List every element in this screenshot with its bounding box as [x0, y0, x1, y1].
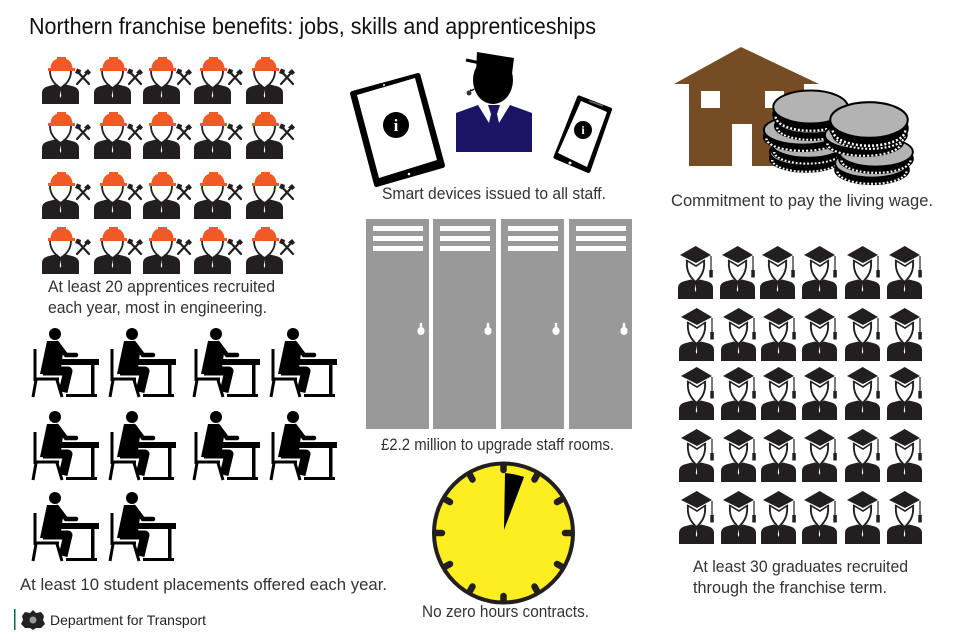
- caption: staff rooms: £2.2 million to upgrade staff rooms.: [381, 436, 614, 454]
- icon: smartphone: [556, 98, 610, 171]
- caption: apprentices: At least 20 apprentices recruited: [48, 278, 275, 296]
- caption: living wage: Commitment to pay the living wage.: [671, 192, 933, 210]
- icon: staff member: [456, 52, 532, 152]
- title: Northern franchise benefits: jobs, skills and apprenticeships: [29, 13, 596, 39]
- icon grid: student placements: [33, 328, 337, 561]
- icon: clock: [434, 464, 573, 602]
- logo: Department for Transport: Department for Transport: [50, 612, 206, 628]
- icon: smartphone: i: [581, 123, 585, 137]
- icon: tablet: i: [394, 116, 399, 135]
- caption: apprentices: [48, 278, 275, 317]
- caption: graduates: [693, 558, 908, 597]
- caption: graduates: At least 30 graduates recruited: [693, 558, 908, 576]
- caption: student placements: At least 10 student placements offered each year.: [20, 576, 387, 594]
- icon: house: [674, 47, 819, 166]
- icon grid: apprentices: [42, 57, 295, 274]
- caption: apprentices: each year, most in engineering.: [48, 299, 267, 317]
- caption: graduates: through the franchise term.: [693, 579, 887, 597]
- caption: smart devices: Smart devices issued to all staff.: [382, 185, 606, 203]
- caption: zero hours: No zero hours contracts.: [422, 603, 589, 621]
- icon: coin stacks: [764, 91, 913, 184]
- icon: staff room lockers: [366, 219, 632, 429]
- icon grid: graduates: [678, 246, 922, 544]
- logo: Department for Transport: [14, 609, 206, 630]
- icon: tablet: [352, 76, 442, 184]
